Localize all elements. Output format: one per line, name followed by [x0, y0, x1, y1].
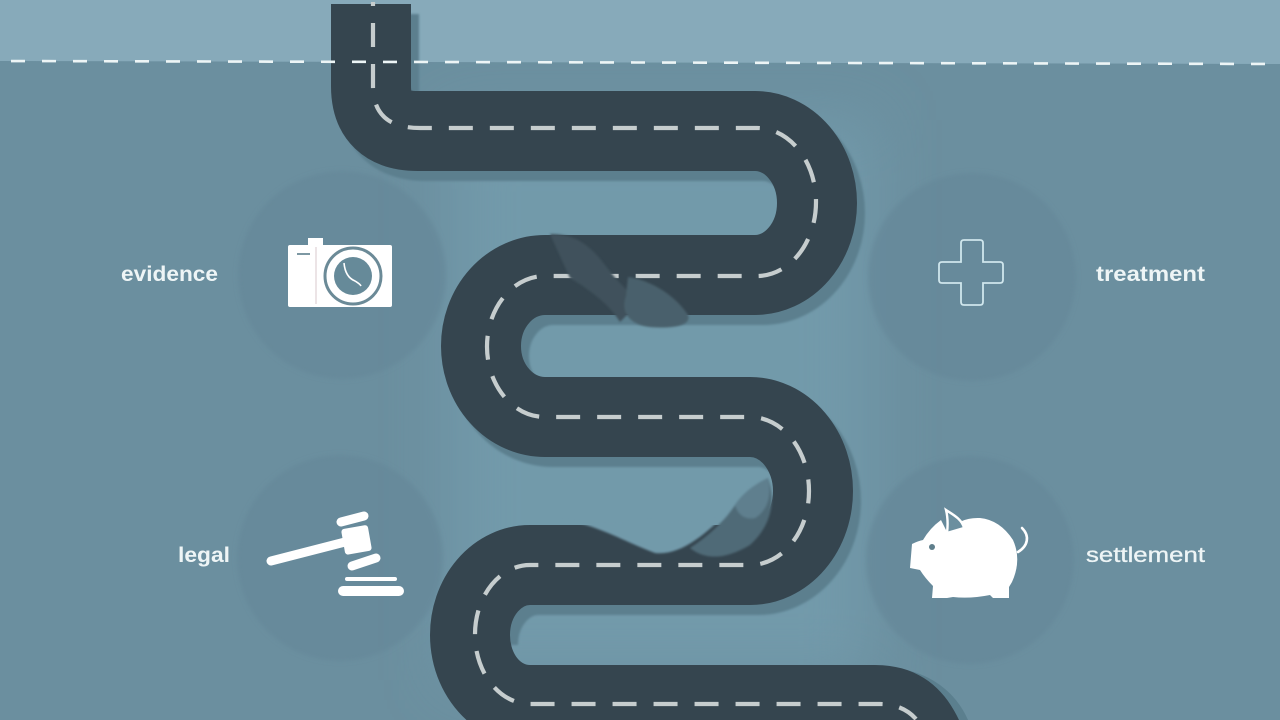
- road shadow: [379, 14, 968, 720]
- road centre dashes: [373, 2, 916, 719]
- label: treatment: treatment: [1096, 263, 1205, 286]
- road: [371, 4, 959, 720]
- icon: gavel: [271, 516, 404, 596]
- circle: legal: [237, 455, 443, 661]
- label: legal: legal: [178, 544, 230, 567]
- horizon dashed line: [0, 61, 1280, 64]
- circle: treatment: [868, 173, 1076, 381]
- label: settlement: settlement: [1086, 544, 1205, 567]
- icon backdrop circles: [237, 171, 1076, 664]
- circle: settlement: [866, 456, 1074, 664]
- road wear smudge: upper bend: [550, 234, 689, 328]
- label: evidence: evidence: [121, 263, 218, 286]
- background: top band: [0, 0, 1280, 64]
- icon: camera: [288, 238, 392, 307]
- background: lighter ground around the road: [450, 120, 870, 680]
- circle: evidence: [238, 171, 446, 379]
- road wear smudge: lower bend: [560, 478, 772, 557]
- icon: medical cross: [939, 240, 1003, 305]
- icon: piggy bank: [910, 510, 1027, 598]
